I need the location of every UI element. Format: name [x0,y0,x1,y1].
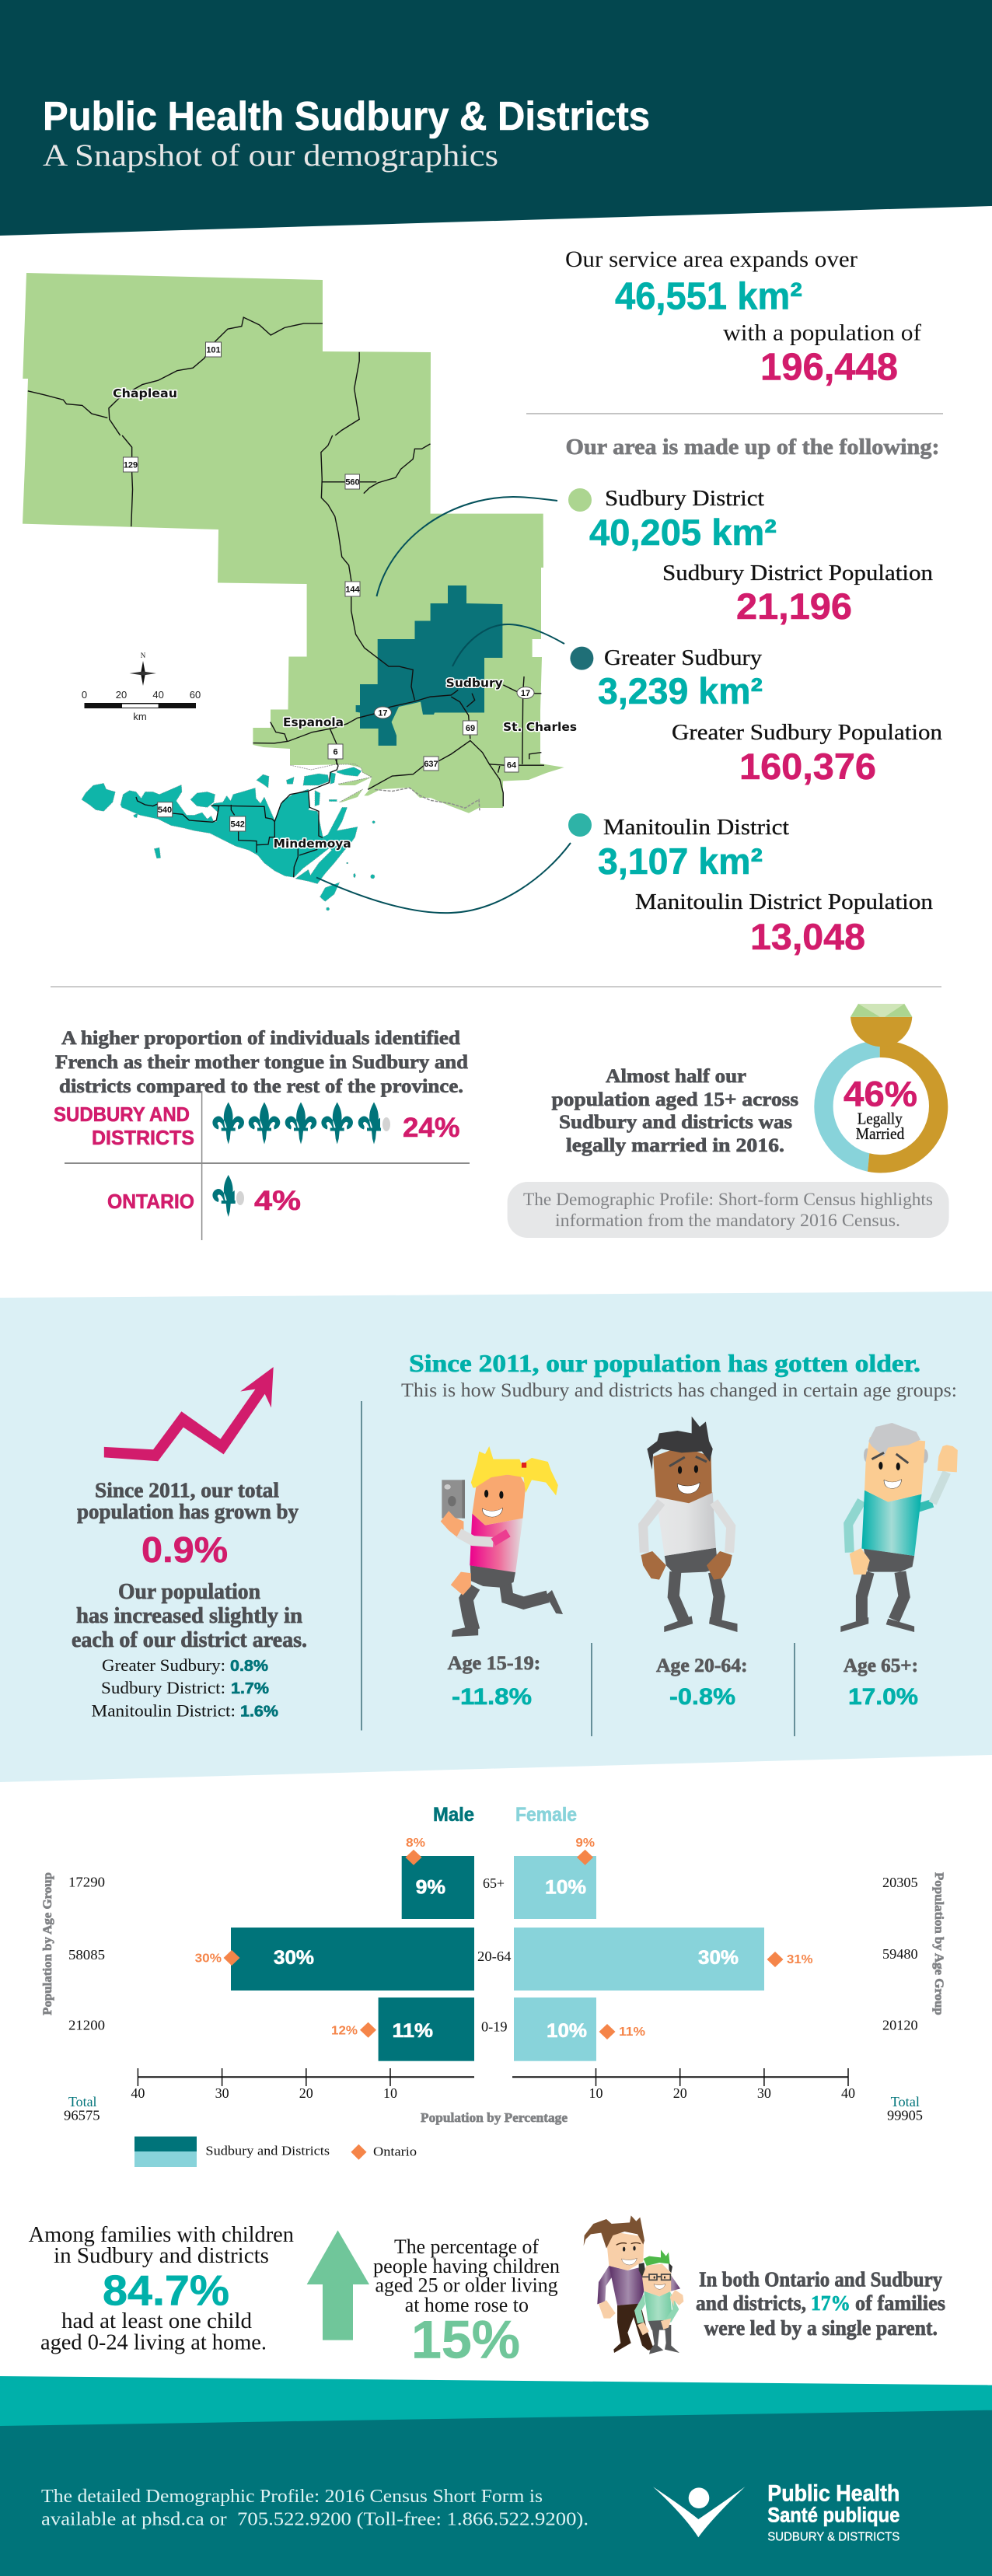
sudbury district stats [568,486,934,627]
population counts: 58085 [68,1947,105,1963]
footer band light [0,2376,992,2430]
legally married label: Legally [858,1110,903,1128]
totals: Total [891,2094,920,2109]
district rates: 1.6% [240,1703,278,1720]
french statement [55,1028,468,1097]
greater sudbury stats: Greater Sudbury Population [672,720,943,745]
total population: 196,448 [760,347,898,389]
logo text: Public Health [767,2481,899,2507]
census note pill: The Demographic Profile: Short-form Census highlights [523,1190,933,1209]
population pyramid chart [41,1804,945,2167]
route numbers: 144 [345,585,361,594]
series headings: Male [433,1804,474,1826]
district increase statement: each of our district areas. [72,1628,307,1652]
totals [64,2094,923,2123]
place names [113,386,577,851]
totals: Total [68,2094,96,2109]
district increase statement [72,1580,307,1652]
route numbers: 637 [424,760,438,769]
bar value labels: 10% [547,2020,587,2042]
sudbury district stats: 21,196 [736,585,852,627]
x axis tick labels [131,2085,855,2101]
4 percent: 4% [254,1186,301,1216]
manitoulin district region [82,767,375,911]
logo text: Santé publique [767,2503,899,2526]
population pyramid chart: Female [515,1804,577,1826]
title: Public Health Sudbury & Districts [43,94,650,139]
census note pill [508,1182,949,1238]
ontario values: 9% [575,1837,595,1850]
male bars [231,1856,474,2061]
age group labels: 0-19 [481,2019,508,2035]
marriage statement: legally married in 2016. [566,1135,784,1156]
district rates: Sudbury District: [101,1678,225,1697]
french mother tongue panel [54,1028,470,1240]
age group changes: -0.8% [669,1684,735,1710]
families with children: in Sudbury and districts [54,2243,269,2268]
route numbers: 17 [378,709,388,718]
character: teen with phone [441,1446,563,1637]
area breakdown heading: Our area is made up of the following: [566,435,939,460]
bar value labels: 9% [416,1877,445,1899]
bar value labels: 30% [274,1947,314,1969]
population counts: 21200 [68,2018,105,2033]
total population panel [72,1367,307,1720]
up arrow [307,2230,369,2340]
single parent statement: 17% [811,2291,851,2315]
district rates [92,1655,278,1720]
age group changes: Age 20-64: [656,1655,748,1676]
0.9 percent: 0.9% [141,1529,228,1570]
district rates: 0.8% [230,1658,268,1675]
population counts [68,1875,918,2033]
bar value labels: 30% [698,1947,739,1969]
single parent statement: In both Ontario and Sudbury [699,2267,942,2291]
age group labels [477,1875,512,2035]
place names: Sudbury [446,676,503,690]
route numbers: 69 [466,724,475,733]
service area summary [565,246,921,389]
older children living at home [373,2235,560,2370]
legally married label [856,1110,905,1143]
families with children: aged 0-24 living at home. [40,2330,267,2354]
manitoulin district stats: 3,107 km² [598,841,763,882]
x axis tick labels: 20 [673,2085,687,2101]
greater sudbury stats: 3,239 km² [598,670,763,711]
north shore fringe [290,764,381,802]
logo text: SUDBURY & DISTRICTS [767,2530,899,2543]
manitoulin district stats: Manitoulin District Population [635,890,934,914]
greater sudbury region [356,585,502,746]
ontario values: 8% [406,1837,425,1850]
highways north [28,317,359,435]
manitoulin district stats [568,813,934,957]
age group changes: Age 65+: [844,1655,918,1676]
single parent statement: of families [855,2291,945,2315]
place names: Mindemoya [274,837,351,851]
families with children [29,2222,294,2354]
ontario values: 30% [195,1952,222,1966]
greater sudbury stats [570,645,943,787]
sudbury district stats: Sudbury District [605,486,764,511]
french statement: A higher proportion of individuals identified [61,1028,460,1049]
marriage statement: population aged 15+ across [552,1089,798,1110]
service area summary: Our service area expands over [565,246,858,272]
logo text [767,2481,899,2543]
population counts: 20305 [882,1875,918,1890]
sudbury district region [23,273,564,813]
fleur-de-lis icons: sudbury and districts [212,1103,390,1145]
ontario markers [224,1850,784,2039]
route numbers: 540 [158,806,172,815]
y axis titles [41,1872,945,2015]
bar value labels: 11% [392,2020,433,2042]
manitoulin district stats: Manitoulin District [603,815,789,840]
ontario label: ONTARIO [107,1190,194,1213]
bar value labels [274,1877,739,2042]
x axis tick labels: 20 [299,2085,313,2101]
growth arrow [104,1367,274,1461]
marriage statement: Sudbury and districts was [559,1112,792,1133]
sudbury and districts label: DISTRICTS [92,1126,194,1149]
46 percent: 46% [844,1074,917,1113]
families with children: Among families with children [29,2222,294,2247]
route numbers: 560 [345,477,360,487]
footer text [41,2487,589,2530]
greater sudbury stats: Greater Sudbury [604,645,763,670]
x axis tick labels: 10 [589,2085,603,2101]
route numbers: 542 [231,820,245,829]
single parent statement [696,2267,945,2340]
age group changes: 17.0% [848,1684,918,1710]
marriage statement [552,1066,798,1156]
census note pill: information from the mandatory 2016 Census. [555,1211,900,1230]
fleur-de-lis icon: ontario [212,1175,244,1217]
route shields [123,342,534,831]
footer text: The detailed Demographic Profile: 2016 Census Short Form is [41,2487,543,2507]
24 percent: 24% [403,1113,460,1143]
totals: 99905 [887,2108,923,2123]
x axis tick labels: 40 [131,2085,145,2101]
x axis tick labels: 30 [757,2085,771,2101]
highways south [122,435,544,806]
x axis tick labels: 40 [841,2085,855,2101]
families with children: had at least one child [61,2309,252,2333]
district rates: Greater Sudbury: [102,1655,225,1675]
footer text: available at phsd.ca or 705.522.9200 (Toll-free: 1.866.522.9200). [41,2510,589,2530]
legend: Ontario [373,2144,417,2159]
sudbury and districts label: SUDBURY AND [54,1103,190,1126]
place names: Espanola [283,715,344,729]
totals: 96575 [64,2108,100,2123]
bar value labels: 10% [545,1877,586,1899]
age group changes: Age 15-19: [448,1653,540,1674]
sudbury district stats: 40,205 km² [589,512,777,553]
callout curves [316,497,571,913]
scale bar: 20 [116,689,127,701]
manitoulin highways [136,760,338,877]
x axis tick labels: 30 [215,2085,229,2101]
family illustration [584,2215,683,2354]
route numbers: 101 [206,345,221,355]
population change band [0,1291,992,1782]
compass: N [141,652,146,659]
route numbers [124,345,530,829]
scale bar [82,689,201,722]
route numbers: 64 [507,760,517,770]
female bars [514,1856,764,2061]
legend: Sudbury and Districts [205,2144,330,2158]
population counts: 59480 [882,1946,918,1962]
sudbury district stats: Sudbury District Population [662,561,934,585]
map of service area [23,273,577,913]
place names: Chapleau [113,386,177,400]
x axes [138,2068,848,2086]
legend [134,2137,417,2167]
character: senior waving [840,1423,958,1632]
x axis title: Population by Percentage [421,2110,568,2125]
scale bar: 60 [190,689,201,701]
route numbers: 129 [124,460,138,470]
french statement: districts compared to the rest of the province. [59,1076,463,1097]
15 percent: 15% [411,2310,520,2370]
district rates: Manitoulin District: [92,1701,236,1720]
district rates: 1.7% [231,1680,269,1697]
marriage panel [508,1004,949,1238]
total area: 46,551 km² [615,275,802,317]
84.7 percent: 84.7% [103,2267,229,2315]
ontario values: 12% [331,2025,358,2038]
age group labels: 20-64 [477,1949,512,1964]
french statement: French as their mother tongue in Sudbury and [55,1052,468,1073]
age group changes: -11.8% [452,1684,532,1710]
ontario values: 31% [787,1953,813,1966]
age group changes [448,1653,918,1710]
greater sudbury stats: 160,376 [739,746,876,787]
single parent statement: and districts, [696,2291,806,2315]
service area summary: with a population of [723,320,921,345]
older children living at home: The percentage of [394,2235,539,2258]
sudbury and districts label [54,1103,194,1149]
scale bar: 40 [152,689,164,701]
subtitle: A Snapshot of our demographics [43,138,498,173]
manitoulin district stats: 13,048 [750,916,865,957]
older children living at home: aged 25 or older living [375,2274,558,2297]
place names: St. Charles [503,720,577,734]
older children living at home: people having children [373,2255,560,2277]
logo mark [653,2487,745,2537]
single parent statement: were led by a single parent. [704,2316,938,2340]
older children living at home: at home rose to [405,2294,529,2316]
scale bar: 0 [82,689,87,701]
character: adult [641,1417,738,1632]
footer band dark [0,2410,992,2576]
district increase statement: Our population [118,1580,260,1604]
ontario values: 11% [619,2025,645,2039]
aging heading [401,1349,957,1401]
ontario values [195,1837,813,2039]
growth statement: Since 2011, our total [95,1479,279,1502]
marriage statement: Almost half our [606,1066,746,1087]
legally married label: Married [856,1124,905,1143]
age group labels: 65+ [483,1875,505,1891]
y axis titles: Population by Age Group [932,1872,945,2015]
ring icon [814,1004,948,1173]
compass [129,652,156,686]
x axis tick labels: 10 [383,2085,397,2101]
population counts: 20120 [882,2018,918,2033]
scale bar: km [133,711,147,722]
header band [0,0,992,236]
growth statement [77,1479,299,1523]
aging heading: Since 2011, our population has gotten older. [409,1349,920,1377]
population counts: 17290 [68,1875,105,1890]
route numbers: 17 [521,689,530,698]
y axis titles: Population by Age Group [41,1872,54,2015]
aging heading: This is how Sudbury and districts has changed in certain age groups: [401,1380,957,1401]
growth statement: population has grown by [77,1500,299,1523]
district increase statement: has increased slightly in [76,1604,302,1628]
route numbers: 6 [333,748,338,757]
